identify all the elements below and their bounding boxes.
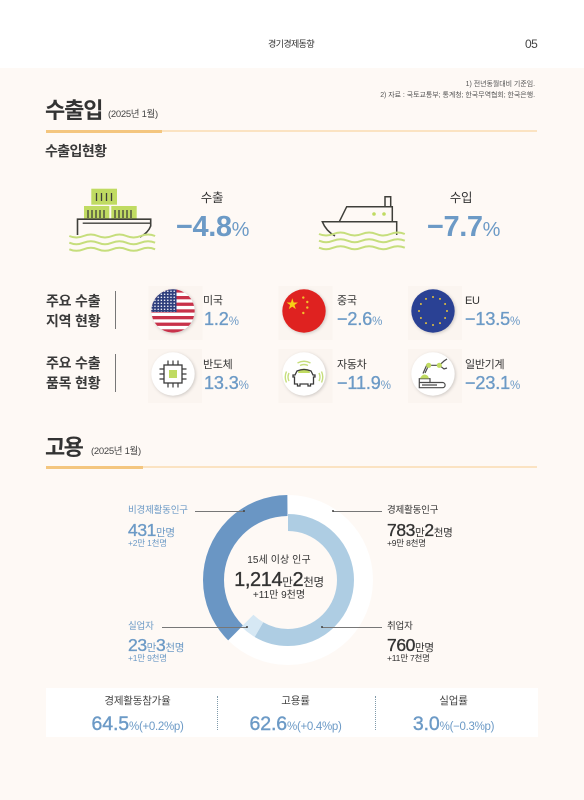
- row label: 주요 수출 지역 현황: 지역 현황: [46, 312, 100, 328]
- icon: US flag: [150, 288, 198, 336]
- value: EU: −13.5%: [465, 308, 520, 328]
- callout: 비경제활동인구: 비경제활동인구: [128, 505, 188, 516]
- page number: 05: [525, 37, 537, 51]
- callout: 경제활동인구: 783만2천명: [387, 520, 452, 540]
- heading: 수출입: 수출입: [45, 98, 102, 123]
- footnotes: 2) 자료 : 국토교통부; 통계청; 한국무역협회; 한국은행.: [380, 92, 535, 98]
- callout: 실업자: 23만3천명: [128, 635, 184, 655]
- label: EU: EU: [465, 295, 480, 307]
- date note: 고용: (2025년 1월): [91, 446, 141, 456]
- icon: export ship: [69, 188, 156, 252]
- heading rule: 고용: [46, 466, 537, 468]
- label: 경제활동참가율: 경제활동참가율: [104, 695, 171, 707]
- value: 수출 증감률: −4.8%: [176, 210, 249, 242]
- icon: car: [281, 351, 329, 399]
- value: 수입 증감률: −7.7%: [427, 210, 500, 242]
- callout: 경제활동인구: +9만 8천명: [387, 538, 426, 548]
- value: 반도체: 13.3%: [204, 372, 249, 392]
- label: 수출: 수출: [201, 191, 223, 205]
- subheading: 수출입현황: 수출입현황: [45, 143, 106, 159]
- label: 반도체: 반도체: [203, 359, 232, 371]
- icon: EU flag: [410, 288, 458, 336]
- row label: 주요 수출 지역 현황: [46, 293, 100, 328]
- row label: 주요 수출 품목 현황: [46, 355, 100, 390]
- heading rule: 수출입: [46, 130, 537, 132]
- icon: robot arm: [410, 351, 458, 399]
- label: 중국: 중국: [337, 295, 357, 307]
- value: 미국: 1.2%: [204, 308, 239, 328]
- value: 중국: −2.6%: [337, 308, 382, 328]
- center change: +11만 9천명: [253, 590, 305, 601]
- label: 수입: 수입: [450, 191, 472, 205]
- callout: 취업자: +11만 7천명: [387, 653, 430, 663]
- callout: 경제활동인구: 경제활동인구: [387, 505, 438, 516]
- center label: 15세 이상 인구: [247, 555, 311, 566]
- value: 일반기계: −23.1%: [465, 372, 520, 392]
- callout: 실업자: +1만 9천명: [128, 653, 167, 663]
- row label: 주요 수출 지역 현황: 주요 수출: [46, 293, 100, 309]
- label: 일반기계: 일반기계: [465, 359, 504, 371]
- label: 실업률: 실업률: [439, 695, 468, 707]
- date note: 수출입: (2025년 1월): [108, 108, 158, 120]
- value: 경제활동참가율: 64.5%(+0.2%p): [91, 712, 184, 734]
- callout: 실업자: 실업자: [128, 621, 154, 632]
- label: 미국: 미국: [203, 295, 223, 307]
- value: 자동차: −11.9%: [337, 372, 391, 392]
- callout: 취업자: 취업자: [387, 621, 413, 632]
- running header: 경기경제동향: [268, 39, 314, 49]
- label: 자동차: 자동차: [337, 359, 366, 371]
- footnotes: [380, 80, 535, 98]
- icon: semiconductor chip: [150, 351, 198, 399]
- callout: 비경제활동인구: +2만 1천명: [128, 538, 167, 548]
- row label: 주요 수출 품목 현황: 주요 수출: [46, 355, 100, 371]
- heading: 고용: 고용: [45, 435, 82, 460]
- footnotes: 1) 전년동월대비 기준임.: [466, 81, 535, 88]
- icon: China flag: [281, 288, 329, 336]
- callout: 비경제활동인구: 431만명: [128, 520, 175, 540]
- center value: 1,214만2천명: [234, 569, 324, 591]
- value: 실업률: 3.0%(−0.3%p): [413, 712, 494, 734]
- panel: employment rates: [46, 688, 538, 737]
- callout: 취업자: 760만명: [387, 635, 434, 655]
- icon: import ship: [318, 196, 406, 250]
- value: 고용률: 62.6%(+0.4%p): [249, 712, 342, 734]
- label: 고용률: 고용률: [281, 695, 310, 707]
- callout: 경제활동인구: [332, 504, 452, 548]
- row label: 주요 수출 품목 현황: 품목 현황: [46, 374, 100, 390]
- donut chart: [203, 495, 373, 665]
- callout: 비경제활동인구: [128, 504, 245, 548]
- callout: 실업자: [128, 620, 248, 663]
- callout: 취업자: [321, 620, 434, 663]
